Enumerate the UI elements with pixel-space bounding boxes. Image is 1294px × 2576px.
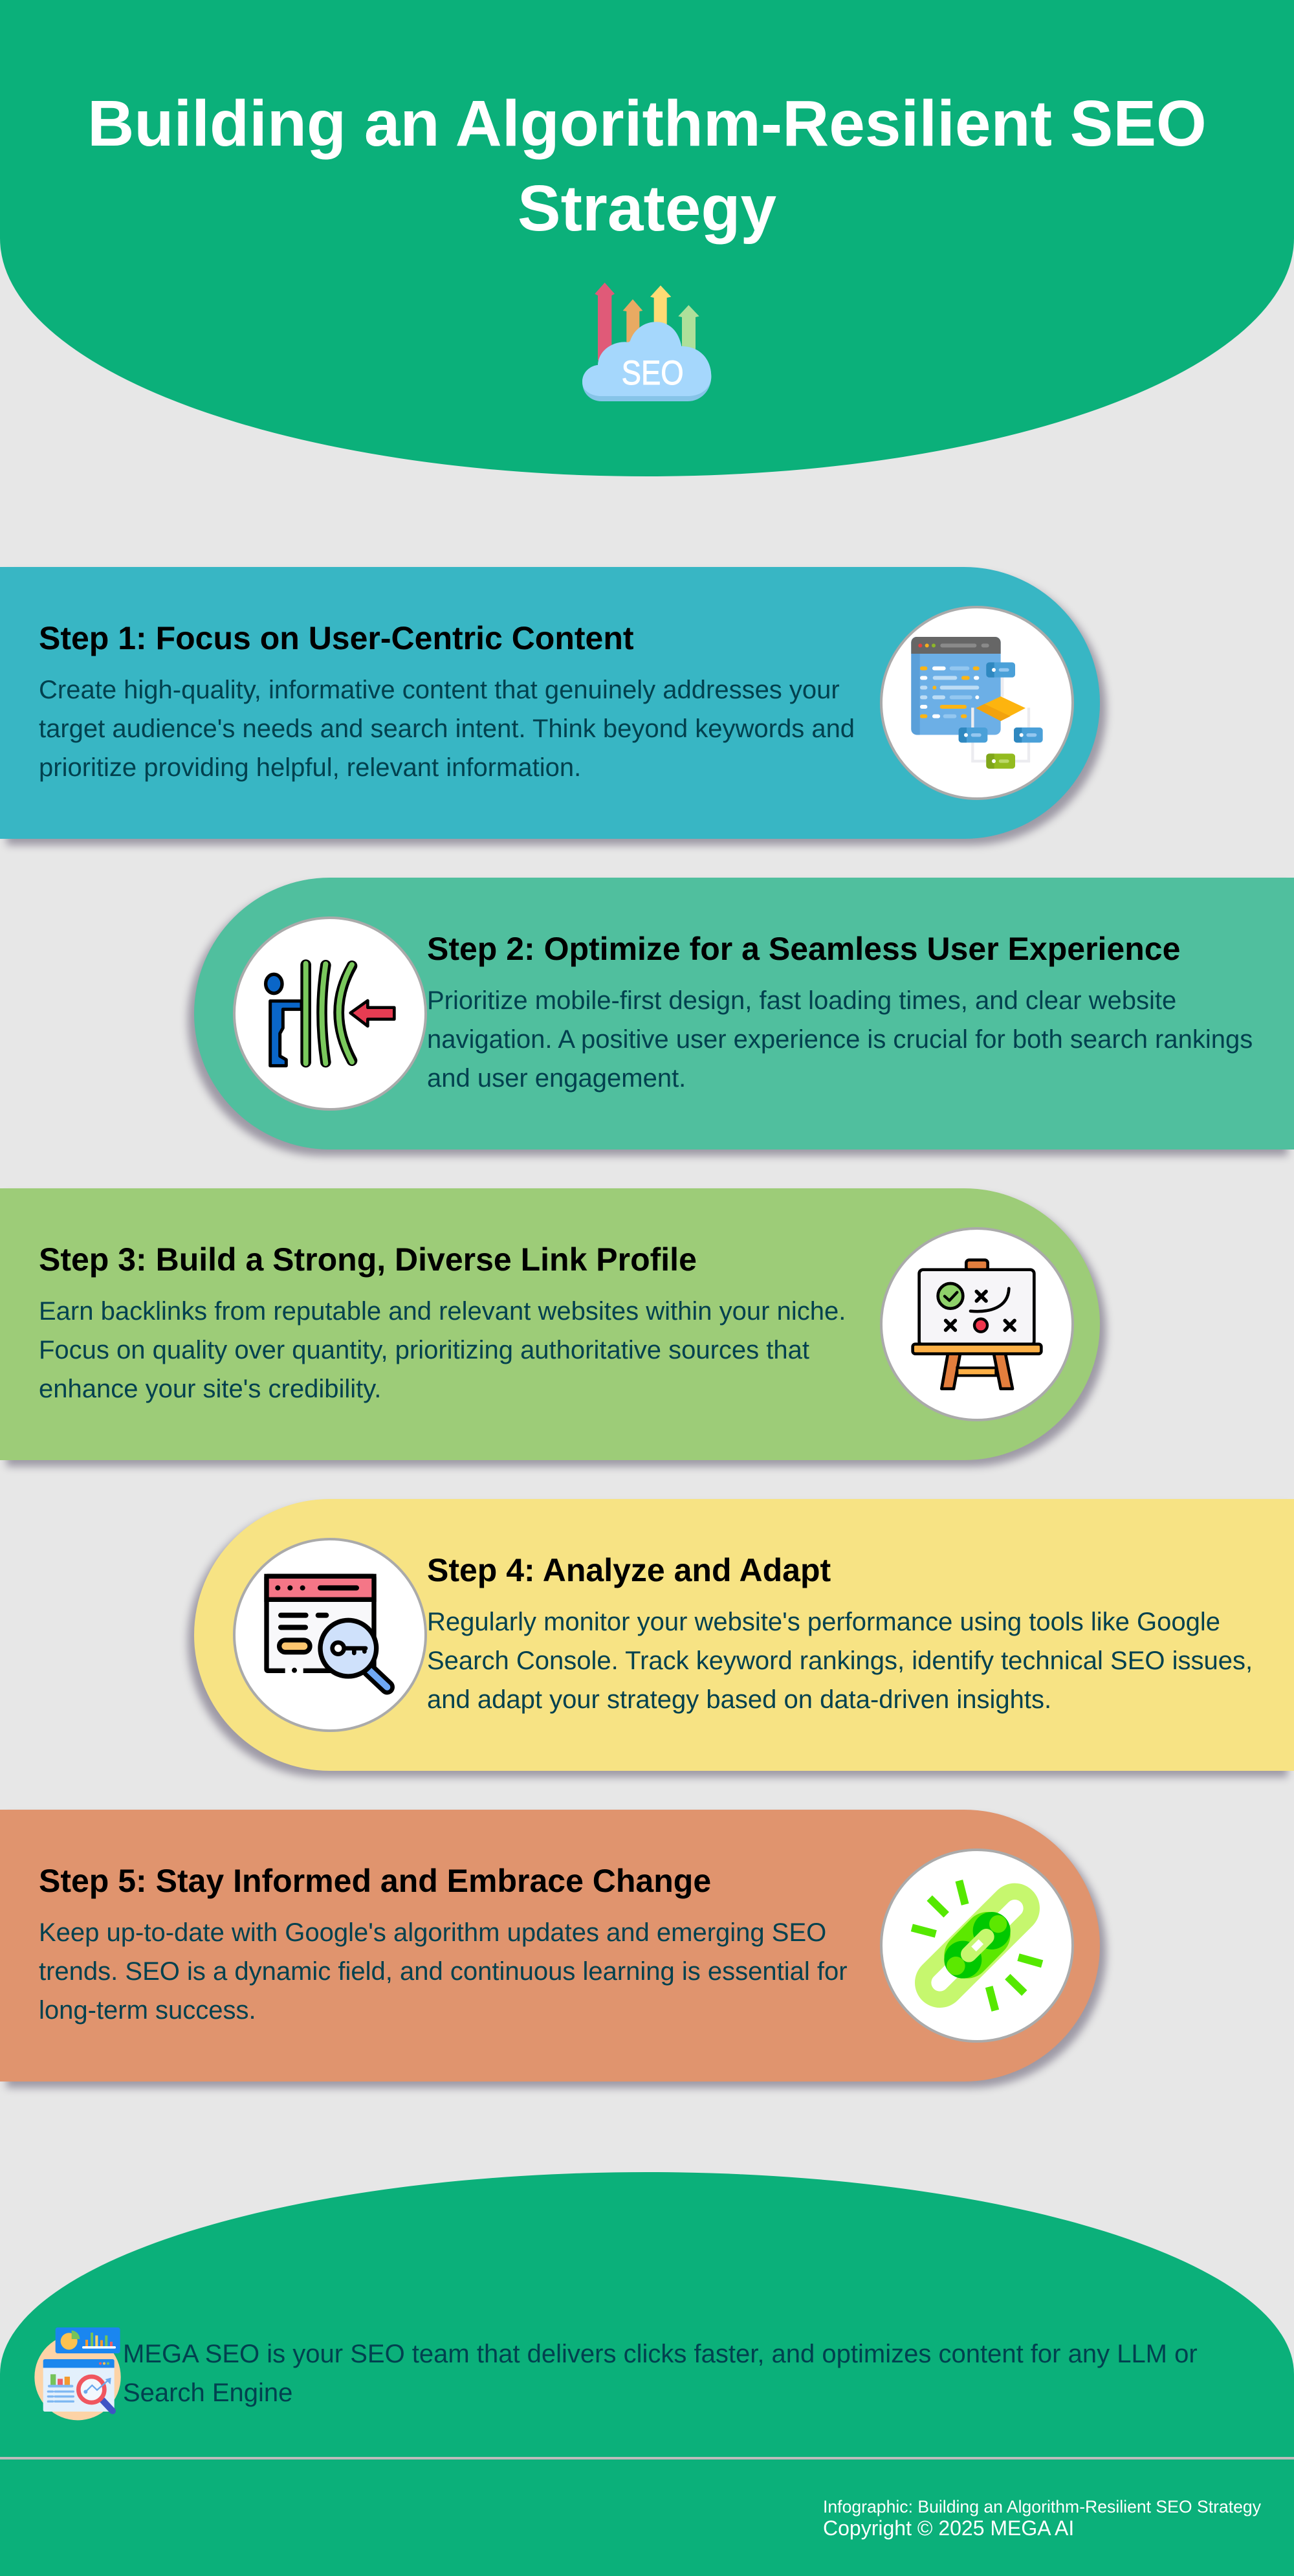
footer description: MEGA SEO is your SEO team that delivers clicks faster, and optimizes content for any LLM or xyxy=(123,2340,1198,2368)
icon: SEO cloud with rising arrows: SEO xyxy=(622,354,684,392)
icon: SEO cloud with rising arrows xyxy=(582,282,712,401)
text: step 5: trends. SEO is a dynamic field, and continuous learning is essential for xyxy=(39,1957,848,1986)
icon: browser window with key magnifier xyxy=(233,1538,427,1732)
heading: step 3: Step 3: Build a Strong, Diverse Link Profile xyxy=(39,1241,697,1278)
icon: person pushing barriers xyxy=(233,916,427,1111)
panel: step 3 xyxy=(0,1188,1100,1460)
footer panel xyxy=(0,2172,1294,2576)
text: step 4: Regularly monitor your website's performance using tools like Google xyxy=(427,1608,1220,1636)
footer description: Search Engine xyxy=(123,2379,292,2407)
icon: code window and flowchart xyxy=(880,606,1074,800)
title xyxy=(87,87,1207,245)
text: step 1: Create high-quality, informative content that genuinely addresses your xyxy=(39,676,840,704)
text: step 4: and adapt your strategy based on data-driven insights. xyxy=(427,1685,1051,1714)
icon: analytics dashboard with magnifier xyxy=(34,2327,121,2421)
icon: chain link xyxy=(880,1849,1074,2043)
text: step 2: Prioritize mobile-first design, fast loading times, and clear website xyxy=(427,986,1176,1015)
heading: step 1: Step 1: Focus on User-Centric Content xyxy=(39,620,634,656)
text: step 4 xyxy=(427,1608,1253,1714)
title: Strategy xyxy=(518,172,776,245)
text: step 4: Search Console. Track keyword rankings, identify technical SEO issues, xyxy=(427,1647,1253,1675)
panel: step 2 xyxy=(194,878,1294,1149)
heading: step 2: Step 2: Optimize for a Seamless User Experience xyxy=(427,931,1180,967)
text: step 3: enhance your site's credibility. xyxy=(39,1375,381,1403)
text: step 5 xyxy=(39,1918,848,2025)
text: step 1: prioritize providing helpful, relevant information. xyxy=(39,753,581,782)
header banner xyxy=(0,0,1294,476)
text: step 3: Earn backlinks from reputable and relevant websites within your niche. xyxy=(39,1297,846,1326)
panel: step 4 xyxy=(194,1499,1294,1771)
divider line xyxy=(0,2457,1294,2459)
title: Building an Algorithm-Resilient SEO xyxy=(87,87,1207,160)
text: step 2 xyxy=(427,986,1253,1093)
footer credit line: Infographic: Building an Algorithm-Resilient SEO Strategy xyxy=(823,2497,1261,2516)
copyright line: Copyright © 2025 MEGA AI xyxy=(823,2516,1074,2540)
panel: step 1 xyxy=(0,567,1100,839)
text: step 1 xyxy=(39,676,855,782)
text: step 3: Focus on quality over quantity, prioritizing authoritative sources that xyxy=(39,1336,809,1364)
text: step 2: navigation. A positive user experience is crucial for both search rankings xyxy=(427,1025,1253,1054)
text: step 5: Keep up-to-date with Google's algorithm updates and emerging SEO xyxy=(39,1918,826,1947)
text: step 1: target audience's needs and search intent. Think beyond keywords and xyxy=(39,715,855,743)
text: step 2: and user engagement. xyxy=(427,1064,686,1093)
heading: step 5: Step 5: Stay Informed and Embrace Change xyxy=(39,1863,711,1899)
heading: step 4: Step 4: Analyze and Adapt xyxy=(427,1552,831,1588)
text: step 3 xyxy=(39,1297,846,1403)
text: step 5: long-term success. xyxy=(39,1996,256,2025)
footer description xyxy=(123,2340,1198,2407)
icon: strategy board on easel xyxy=(880,1227,1074,1421)
panel: step 5 xyxy=(0,1810,1100,2082)
